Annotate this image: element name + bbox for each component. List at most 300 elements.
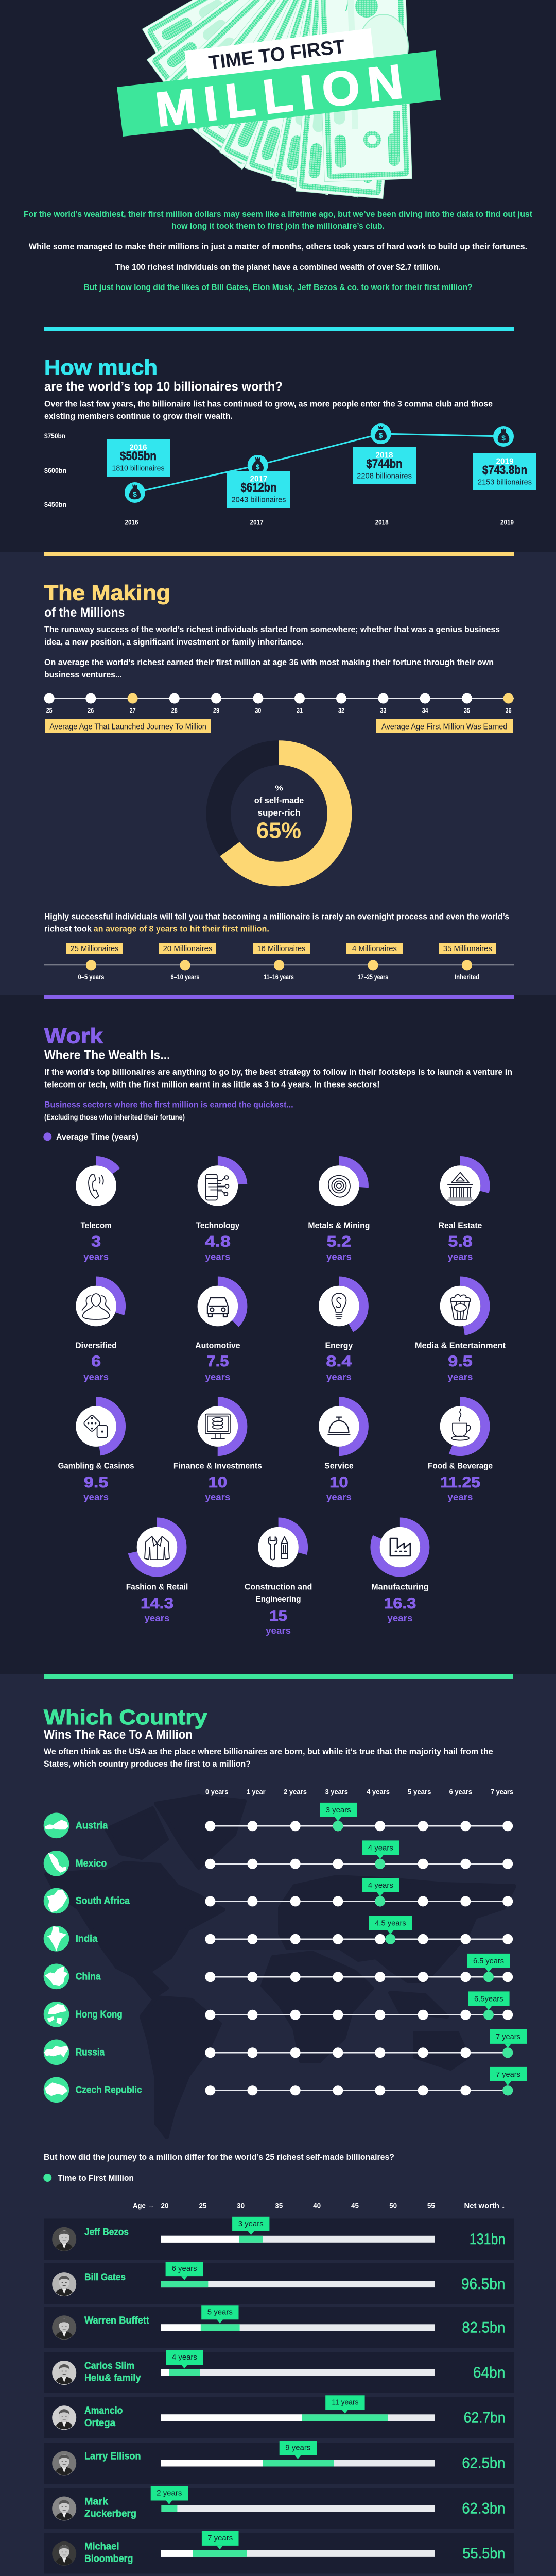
- sector: diversified: years: [83, 1372, 109, 1382]
- sector: real estate: years: [448, 1252, 473, 1262]
- icon: smartphone circuit: [206, 1175, 229, 1200]
- panel: work sectors: [43, 1024, 512, 1636]
- sector: manufacturing: years: [387, 1613, 412, 1623]
- timeline: years to first million: 0–5 years: [78, 973, 104, 981]
- sector: service: years: [326, 1492, 352, 1502]
- marker: [375, 1859, 385, 1869]
- data line: [135, 434, 503, 493]
- portrait: [52, 2451, 76, 2475]
- timeline: age: 26: [88, 707, 94, 715]
- sector: manufacturing: Manufacturing: [371, 1582, 429, 1591]
- axis: age and net worth: 20: [161, 2201, 169, 2210]
- portrait: [52, 2541, 76, 2566]
- panel: which country: [44, 1705, 527, 2137]
- icon: car: [207, 1298, 228, 1317]
- callout: [320, 1803, 357, 1821]
- name: Bill Gates: [84, 2272, 126, 2283]
- sector: media and entertainment: [415, 1281, 506, 1382]
- text block: If the world’s top billionaires are anything to go by, the best strategy to follow in their footsteps is to launch a venture in: [44, 1067, 512, 1077]
- text block: intro: [24, 209, 532, 292]
- panel: hero header: [117, 0, 441, 199]
- title: time to first: [184, 28, 374, 85]
- icon: Mexico map: [44, 1851, 69, 1876]
- callout: [166, 2262, 203, 2280]
- x axis labels: 2018: [375, 518, 389, 527]
- y axis labels: $600bn: [44, 466, 66, 474]
- callout: [490, 2067, 527, 2086]
- axis: years: 2 years: [284, 1787, 307, 1795]
- sector: finance and investments: Finance & Investments: [173, 1461, 262, 1470]
- sector: fashion and retail: years: [144, 1613, 170, 1623]
- country row: China: [44, 1954, 513, 1989]
- timeline: years to first million: 4 Millionaires: [352, 944, 397, 953]
- donut chart: self-made: %: [275, 784, 283, 793]
- callout: 7 years: [496, 2032, 520, 2041]
- sector: fashion and retail: 14.3: [141, 1595, 173, 1612]
- country row: Mexico: [44, 1840, 513, 1876]
- sector: metals and mining: [308, 1161, 370, 1262]
- callout: 6 years: [172, 2264, 197, 2273]
- icon: building: [447, 1173, 473, 1200]
- x axis labels: 2019: [500, 518, 514, 527]
- sector: fashion and retail: [126, 1522, 188, 1623]
- callout: 7 years: [207, 2534, 233, 2543]
- panel: richest billionaires table: [43, 2152, 514, 2576]
- sector: food and beverage: years: [448, 1492, 473, 1502]
- callout: [232, 2217, 269, 2235]
- callout: 6.5years: [474, 1994, 503, 2003]
- sector: service: 10: [329, 1474, 349, 1491]
- title: time to first: TIME TO FIRST: [207, 36, 346, 74]
- callout: 2018: 2018: [376, 451, 393, 460]
- marker: [375, 1896, 385, 1906]
- callout: [362, 1878, 399, 1896]
- net worth: 131bn: [470, 2231, 505, 2248]
- icon: Hong Kong map: [44, 2002, 69, 2027]
- text block: We often think as the USA as the place where billionaires are born, but while it’s true that the majority hail from the: [44, 1747, 493, 1756]
- icon: money bag 2019: $: [501, 434, 506, 442]
- portrait: [52, 2227, 76, 2251]
- sector: technology: Technology: [196, 1221, 240, 1230]
- callout: 2017: [227, 471, 290, 508]
- sector: energy: Energy: [325, 1341, 353, 1350]
- marker: [483, 1972, 494, 1982]
- sector: real estate: 5.8: [448, 1233, 473, 1250]
- timeline: age: 29: [213, 707, 219, 715]
- sector: real estate: [436, 1161, 485, 1262]
- timeline: years to first million: 25 Millionaires: [70, 944, 118, 953]
- timeline: age: [44, 693, 514, 715]
- net worth: 55.5bn: [462, 2545, 505, 2562]
- heading: work: Work: [44, 1024, 103, 1048]
- donut chart: self-made: 65%: [256, 818, 301, 843]
- label: first million age: [376, 719, 513, 733]
- sector: gambling and casinos: [58, 1401, 134, 1502]
- callout: [490, 2029, 527, 2048]
- net worth: 82.5bn: [462, 2319, 505, 2336]
- icon: money bag 2017: $: [256, 463, 260, 471]
- icon: Czech Republic map: [44, 2077, 69, 2103]
- sector: construction and engineering: years: [266, 1625, 291, 1636]
- text block: [44, 1747, 493, 1769]
- callout: 11 years: [332, 2398, 358, 2406]
- name: India: [76, 1934, 98, 1944]
- name: South Africa: [76, 1895, 130, 1906]
- title: million: MILLION: [153, 54, 406, 137]
- icon: ore: [328, 1176, 350, 1197]
- line chart: wealth by year: [44, 423, 536, 527]
- callout: [201, 2305, 239, 2324]
- icon: wrench and pencil: [268, 1537, 288, 1560]
- name: Russia: [76, 2047, 105, 2058]
- x axis labels: [125, 518, 514, 527]
- callout: 2016: 2016: [130, 443, 147, 452]
- sector: technology: [193, 1161, 242, 1262]
- sector: gambling and casinos: Gambling & Casinos: [58, 1461, 134, 1470]
- text block: an average of 8 years to hit their first million.: [94, 924, 269, 934]
- bar: [161, 2550, 435, 2557]
- donut chart: self-made: of self-made: [254, 795, 304, 805]
- callout: 3 years: [326, 1806, 351, 1815]
- sector: media and entertainment: years: [448, 1372, 473, 1382]
- marker: [483, 2010, 494, 2020]
- axis: years: [205, 1787, 513, 1795]
- axis: age and net worth: 25: [199, 2201, 207, 2210]
- callout: 4 years: [368, 1881, 393, 1890]
- axis: age and net worth: 40: [313, 2201, 321, 2210]
- sector: manufacturing: [371, 1522, 429, 1623]
- callout: 3 years: [238, 2219, 264, 2228]
- sector: diversified: [71, 1281, 121, 1382]
- name: Austria: [76, 1820, 108, 1831]
- bar: [161, 2414, 435, 2421]
- icon: telephone: [89, 1175, 103, 1198]
- callout: 2018: $744bn: [367, 457, 403, 471]
- axis: age and net worth: [133, 2201, 506, 2210]
- icon: people: [82, 1294, 110, 1319]
- sector: construction and engineering: Construction and: [245, 1582, 312, 1591]
- sector: energy: [314, 1281, 364, 1382]
- sector: automotive: years: [205, 1372, 230, 1382]
- row: Bill Gates: [44, 2262, 514, 2304]
- name: Jeff Bezos: [84, 2227, 129, 2238]
- axis: years: 6 years: [449, 1787, 472, 1795]
- name: China: [76, 1971, 101, 1982]
- country row: South Africa: [44, 1878, 513, 1913]
- callout: 9 years: [285, 2443, 310, 2452]
- axis: years: 1 year: [247, 1787, 266, 1795]
- legend: Time to First Million: [58, 2173, 134, 2183]
- panel: the making: [44, 581, 514, 981]
- icon: India map: [44, 1926, 69, 1952]
- icon: money bag 2018: $: [379, 431, 383, 439]
- row: Amancio Ortega: [44, 2395, 514, 2438]
- icon: money bag 2016: $: [133, 490, 137, 498]
- marker: [502, 2085, 513, 2095]
- sector: construction and engineering: 15: [269, 1607, 287, 1624]
- text block: [44, 1067, 512, 1089]
- sector: food and beverage: 11.25: [440, 1474, 480, 1491]
- timeline: years to first million: 6–10 years: [171, 973, 200, 981]
- icon: jacket: [145, 1536, 169, 1560]
- sector: finance and investments: [173, 1401, 262, 1502]
- bar: [161, 2369, 435, 2376]
- label: first million age: Average Age First Million Was Earned: [381, 723, 508, 732]
- axis: age and net worth: 30: [237, 2201, 245, 2210]
- name: Michael: [84, 2541, 119, 2552]
- y axis labels: $750bn: [44, 432, 65, 440]
- bar: [161, 2505, 435, 2512]
- country row: Czech Republic: [44, 2067, 527, 2103]
- sector: manufacturing: 16.3: [384, 1595, 416, 1612]
- callout: [369, 1916, 412, 1935]
- name: Bloomberg: [84, 2553, 133, 2564]
- row: Jeff Bezos: [44, 2217, 514, 2260]
- callout: 2017: 2043 billionaires: [232, 496, 286, 504]
- country row: India: [44, 1916, 513, 1952]
- icon: dice: [83, 1415, 108, 1438]
- timeline: age: 25: [46, 707, 53, 715]
- axis: age and net worth: 50: [389, 2201, 397, 2210]
- icon: money bag 2016: [125, 482, 145, 503]
- callout: 5 years: [207, 2308, 233, 2316]
- axis: years: 5 years: [408, 1787, 431, 1795]
- y axis labels: $450bn: [44, 500, 66, 509]
- timeline: years to first million: Inherited: [455, 973, 479, 981]
- net worth: 96.5bn: [461, 2276, 505, 2293]
- timeline: years to first million: 17–25 years: [358, 973, 388, 981]
- icon: coffee cup: [451, 1409, 471, 1440]
- panel: how much: [44, 355, 536, 527]
- timeline: age: 31: [297, 707, 303, 715]
- name: Ortega: [84, 2418, 115, 2429]
- callout: 2019: [473, 453, 536, 490]
- net worth: 62.3bn: [462, 2500, 505, 2517]
- text block: intro: But just how long did the likes of Bill Gates, Elon Musk, Jeff Bezos & co. to work for their first million?: [83, 282, 473, 292]
- timeline: age: 32: [338, 707, 344, 715]
- subheading: Where The Wealth Is...: [44, 1048, 170, 1062]
- icon: Russia map: [44, 2039, 69, 2065]
- text block: richest took: [44, 924, 92, 934]
- sector: fashion and retail: Fashion & Retail: [126, 1582, 188, 1591]
- timeline: years to first million: 35 Millionaires: [443, 944, 492, 953]
- sector: media and entertainment: 9.5: [448, 1353, 473, 1370]
- axis: age and net worth: Net worth ↓: [464, 2201, 506, 2210]
- sector: automotive: Automotive: [195, 1341, 240, 1350]
- subheading: are the world’s top 10 billionaires worth?: [44, 380, 283, 394]
- country row: Russia: [44, 2029, 527, 2065]
- callout: [151, 2486, 188, 2504]
- sector: metals and mining: 5.2: [327, 1233, 351, 1250]
- text block: existing members continue to grow their wealth.: [44, 411, 233, 421]
- sector: telecom: Telecom: [81, 1221, 112, 1230]
- sector: service: [314, 1401, 364, 1502]
- name: Zuckerberg: [84, 2509, 136, 2519]
- label: launch age: [45, 719, 211, 733]
- heading: the making: The Making: [44, 581, 170, 605]
- text block: business ventures...: [44, 670, 122, 680]
- text block: telecom or tech, with the first million earnt in as little as 3 to 4 years. In these sectors!: [44, 1079, 380, 1089]
- marker: [502, 2047, 513, 2058]
- callout: [325, 2395, 365, 2414]
- text block: intro: While some managed to make their millions in just a matter of months, others took years of hard work to build up their fortunes.: [29, 242, 527, 251]
- bar: [161, 2281, 435, 2287]
- y axis labels: [44, 432, 66, 509]
- icon: monitor with coins: [205, 1414, 230, 1439]
- donut chart: self-made: super-rich: [257, 808, 301, 818]
- sector: energy: 8.4: [326, 1353, 352, 1370]
- timeline: age: 33: [380, 707, 386, 715]
- callout: [467, 1954, 510, 1972]
- name: Warren Buffett: [84, 2315, 150, 2326]
- sector: gambling and casinos: 9.5: [84, 1474, 108, 1491]
- portrait: [52, 2315, 76, 2340]
- callout: [362, 1840, 399, 1859]
- portrait: [52, 2361, 76, 2385]
- callout: 2017: 2017: [250, 475, 268, 483]
- portrait: [52, 2497, 76, 2520]
- axis: age and net worth: 35: [275, 2201, 283, 2210]
- icon: Austria map: [44, 1812, 69, 1838]
- name: Larry Ellison: [84, 2451, 141, 2462]
- marker: [333, 1821, 343, 1831]
- sector: food and beverage: Food & Beverage: [428, 1461, 493, 1470]
- callout: 2017: $612bn: [241, 481, 277, 495]
- name: Czech Republic: [76, 2084, 142, 2095]
- sector: diversified: 6: [91, 1353, 101, 1370]
- text block: On average the world’s richest earned their first million at age 36 with most making their fortune through their own: [44, 657, 494, 667]
- name: [84, 2496, 136, 2519]
- text block: The runaway success of the world’s richest individuals started from somewhere; whether that was a genius business: [44, 624, 500, 634]
- icon: money bag 2017: [248, 455, 268, 476]
- x axis labels: 2016: [125, 518, 138, 527]
- name: [84, 2361, 141, 2383]
- sector: media and entertainment: Media & Entertainment: [415, 1341, 506, 1350]
- callout: 2016: 1810 billionaires: [112, 464, 165, 473]
- timeline: years to first million: 20 Millionaires: [163, 944, 212, 953]
- sector: telecom: [71, 1161, 121, 1262]
- legend: Average Time (years): [56, 1132, 138, 1142]
- name: Helu& family: [84, 2373, 141, 2383]
- portrait: [52, 2405, 76, 2430]
- timeline: age: 27: [130, 707, 136, 715]
- timeline: age: 36: [506, 707, 512, 715]
- icon: service bell: [328, 1417, 350, 1435]
- axis: years: 7 years: [491, 1787, 513, 1795]
- callout: 2016: [107, 439, 170, 477]
- timeline: years to first million: [44, 943, 514, 981]
- callout: 4 years: [172, 2353, 197, 2362]
- chart note: (Excluding those who inherited their fortune): [44, 1113, 185, 1122]
- name: Carlos Slim: [84, 2361, 134, 2371]
- icon: light bulb: [332, 1293, 346, 1318]
- icon: South Africa map: [44, 1888, 69, 1913]
- callout: 6.5 years: [473, 1957, 504, 1965]
- sector: real estate: Real Estate: [439, 1221, 482, 1230]
- axis: age and net worth: Age →: [133, 2201, 154, 2210]
- callout: 2019: 2153 billionaires: [478, 478, 532, 486]
- timeline: years to first million: 11–16 years: [264, 973, 294, 981]
- name: [84, 2541, 133, 2564]
- callout: 2018: [353, 447, 416, 484]
- icon: factory: [390, 1538, 410, 1556]
- text block: [44, 912, 509, 934]
- callout: 4 years: [368, 1843, 393, 1852]
- text block: Highly successful individuals will tell you that becoming a millionaire is rarely an overnight process and even the world’s: [44, 912, 509, 922]
- name: Hong Kong: [76, 2009, 123, 2020]
- icon: money bag 2018: [371, 423, 391, 444]
- timeline: age: 28: [171, 707, 178, 715]
- text block: idea, a new position, a significant investment or family inheritance.: [44, 637, 304, 647]
- axis: years: 4 years: [367, 1787, 390, 1795]
- donut chart: self-made: [218, 753, 340, 874]
- sector: construction and engineering: Engineering: [256, 1594, 301, 1604]
- callout: 7 years: [496, 2070, 520, 2079]
- background: world map: [46, 1797, 514, 2137]
- portrait: [52, 2272, 76, 2296]
- callout: [202, 2531, 239, 2549]
- sector: technology: years: [205, 1252, 230, 1262]
- sector: telecom: years: [83, 1252, 109, 1262]
- name: Amancio: [84, 2405, 123, 2416]
- name: [84, 2405, 123, 2429]
- heading: how much: How much: [44, 355, 158, 379]
- callout: 4.5 years: [375, 1919, 406, 1927]
- icon: popcorn: [450, 1295, 471, 1319]
- text block: intro: how long it took them to first join the millionaire’s club.: [171, 221, 385, 231]
- marker: [385, 1934, 395, 1944]
- sector: metals and mining: Metals & Mining: [308, 1221, 370, 1230]
- axis: years: 0 years: [205, 1787, 229, 1795]
- row: Michael Bloomberg: [44, 2531, 514, 2574]
- net worth: 64bn: [473, 2364, 505, 2381]
- timeline: age: 30: [255, 707, 261, 715]
- icon: money bag 2019: [493, 426, 514, 447]
- sector: technology: 4.8: [205, 1233, 231, 1250]
- text block: intro: For the world’s wealthiest, their first million dollars may seem like a lifetime ago, but we’ve been diving into the data to find out just: [24, 209, 532, 219]
- sector: construction and engineering: [245, 1522, 312, 1636]
- callout: [166, 2350, 203, 2369]
- sector: diversified: Diversified: [75, 1341, 117, 1350]
- text block: Over the last few years, the billionaire list has continued to grow, as more people enter the 3 comma club and those: [44, 399, 493, 409]
- sector: finance and investments: years: [205, 1492, 230, 1502]
- axis: age and net worth: 55: [427, 2201, 435, 2210]
- callout: [468, 1991, 510, 2010]
- callout: 2 years: [157, 2488, 182, 2498]
- timeline: age: 35: [464, 707, 470, 715]
- timeline: age: 34: [422, 707, 428, 715]
- bar: [161, 2236, 435, 2243]
- text block: intro: The 100 richest individuals on the planet have a combined wealth of over $2.7 trillion.: [115, 262, 441, 272]
- name: Mark: [84, 2496, 108, 2507]
- bar: [161, 2324, 435, 2331]
- net worth: 62.5bn: [462, 2454, 505, 2472]
- sector: gambling and casinos: years: [83, 1492, 109, 1502]
- text block: [44, 399, 493, 421]
- country row: Hong Kong: [44, 1991, 513, 2027]
- question: But how did the journey to a million differ for the world’s 25 richest self-made billionaires?: [44, 2152, 394, 2162]
- sector: energy: years: [326, 1372, 352, 1382]
- country row: Austria: [44, 1803, 513, 1838]
- sector: automotive: 7.5: [206, 1353, 229, 1370]
- axis: age and net worth: 45: [351, 2201, 359, 2210]
- sector: food and beverage: [428, 1401, 493, 1502]
- chart title: Business sectors where the first million is earned the quickest...: [44, 1100, 293, 1110]
- sector: finance and investments: 10: [208, 1474, 227, 1491]
- net worth: 62.7bn: [464, 2409, 505, 2426]
- timeline: years to first million: 16 Millionaires: [257, 944, 306, 953]
- text block: States, which country produces the first to a million?: [44, 1759, 251, 1769]
